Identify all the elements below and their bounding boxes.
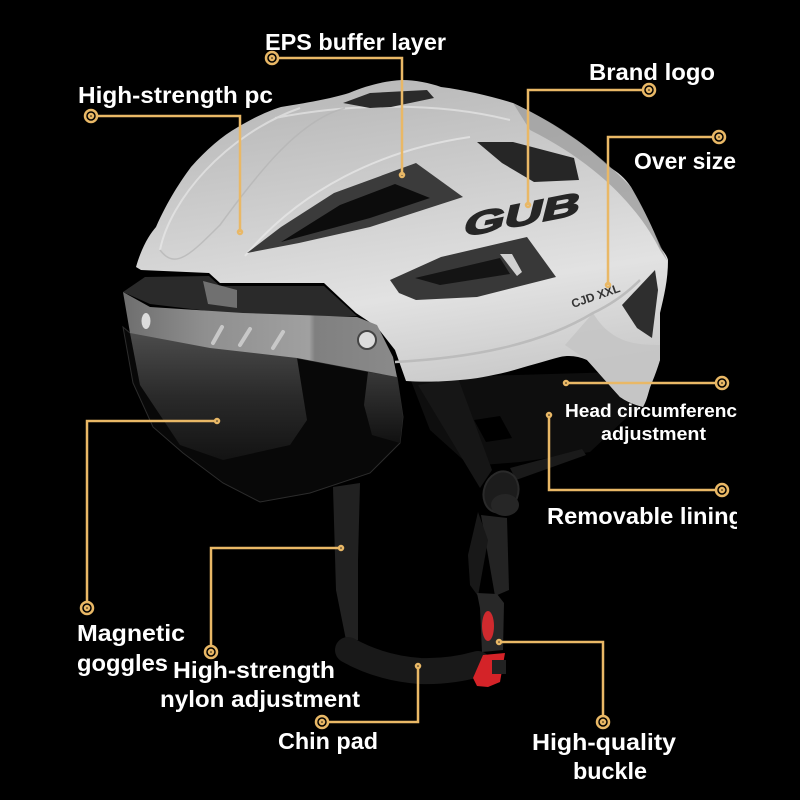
leader: Head circumference adjustment	[564, 377, 728, 389]
rear strap	[418, 378, 492, 488]
main vent	[247, 163, 463, 253]
leader: High-strength nylon adjustment	[205, 546, 343, 658]
label: Magnetic goggles	[77, 620, 185, 676]
lens glow	[130, 333, 307, 460]
leader: Over size	[606, 131, 725, 287]
right strap loops	[481, 515, 509, 596]
visor studs	[142, 313, 150, 329]
label: High-quality buckle: buckle	[573, 758, 647, 784]
helmet illustration	[123, 80, 668, 687]
label: Chin pad: Chin pad	[278, 728, 378, 754]
label: High-strength nylon adjustment	[160, 657, 360, 712]
inner padding and harness	[410, 372, 640, 466]
lower vent	[390, 237, 556, 300]
label: High-quality buckle	[532, 729, 676, 784]
label: High-strength pc: High-strength pc	[78, 82, 273, 108]
side strap to adjuster	[510, 449, 586, 480]
front panel line	[160, 108, 345, 259]
top vent	[343, 90, 434, 108]
label: High-strength nylon adjustment: High-strength	[173, 657, 335, 683]
chin pad	[348, 650, 478, 671]
leader: Chin pad	[316, 664, 420, 728]
label: Head circumference adjustment: adjustment	[601, 424, 706, 444]
rear top shade	[513, 103, 668, 262]
label: High-strength nylon adjustment: nylon adjustment	[160, 686, 360, 712]
crown ridge line	[160, 107, 510, 250]
strap slider	[478, 466, 524, 518]
upper ridge	[245, 137, 470, 256]
front foam	[123, 276, 357, 316]
leader: Magnetic goggles	[81, 419, 219, 614]
lens right glow	[364, 372, 403, 443]
leader: Brand logo	[526, 84, 655, 207]
label: Over size: Over size	[634, 148, 736, 174]
lower rear lobe	[565, 313, 660, 407]
size mark: CJD XXL	[569, 281, 622, 311]
leader: EPS buffer layer	[266, 52, 404, 177]
label: Head circumference adjustment: Head circumferenc	[565, 401, 737, 421]
left strap	[333, 483, 360, 640]
back vent	[622, 270, 658, 338]
helmet shell	[136, 80, 668, 407]
label: Removable lining: Removable lining	[547, 503, 743, 529]
label: High-quality buckle: High-quality	[532, 729, 676, 755]
visor lens	[123, 327, 403, 502]
leader: Removable lining	[547, 413, 728, 496]
visor strip	[123, 292, 397, 377]
crease line	[395, 280, 640, 362]
visor slits	[213, 327, 283, 348]
label: Brand logo: Brand logo	[589, 59, 715, 85]
logo: GUB: GUB	[460, 184, 585, 244]
leader: High-quality buckle	[497, 640, 609, 728]
adjuster window	[474, 416, 512, 442]
right top vent	[477, 142, 579, 182]
label: Magnetic goggles: goggles	[77, 650, 168, 676]
label: EPS buffer layer: EPS buffer layer	[265, 29, 446, 55]
label: Head circumference adjustment	[565, 401, 737, 444]
label: Magnetic goggles: Magnetic	[77, 620, 185, 646]
leader: High-strength pc	[85, 110, 242, 234]
buckle	[473, 593, 506, 687]
